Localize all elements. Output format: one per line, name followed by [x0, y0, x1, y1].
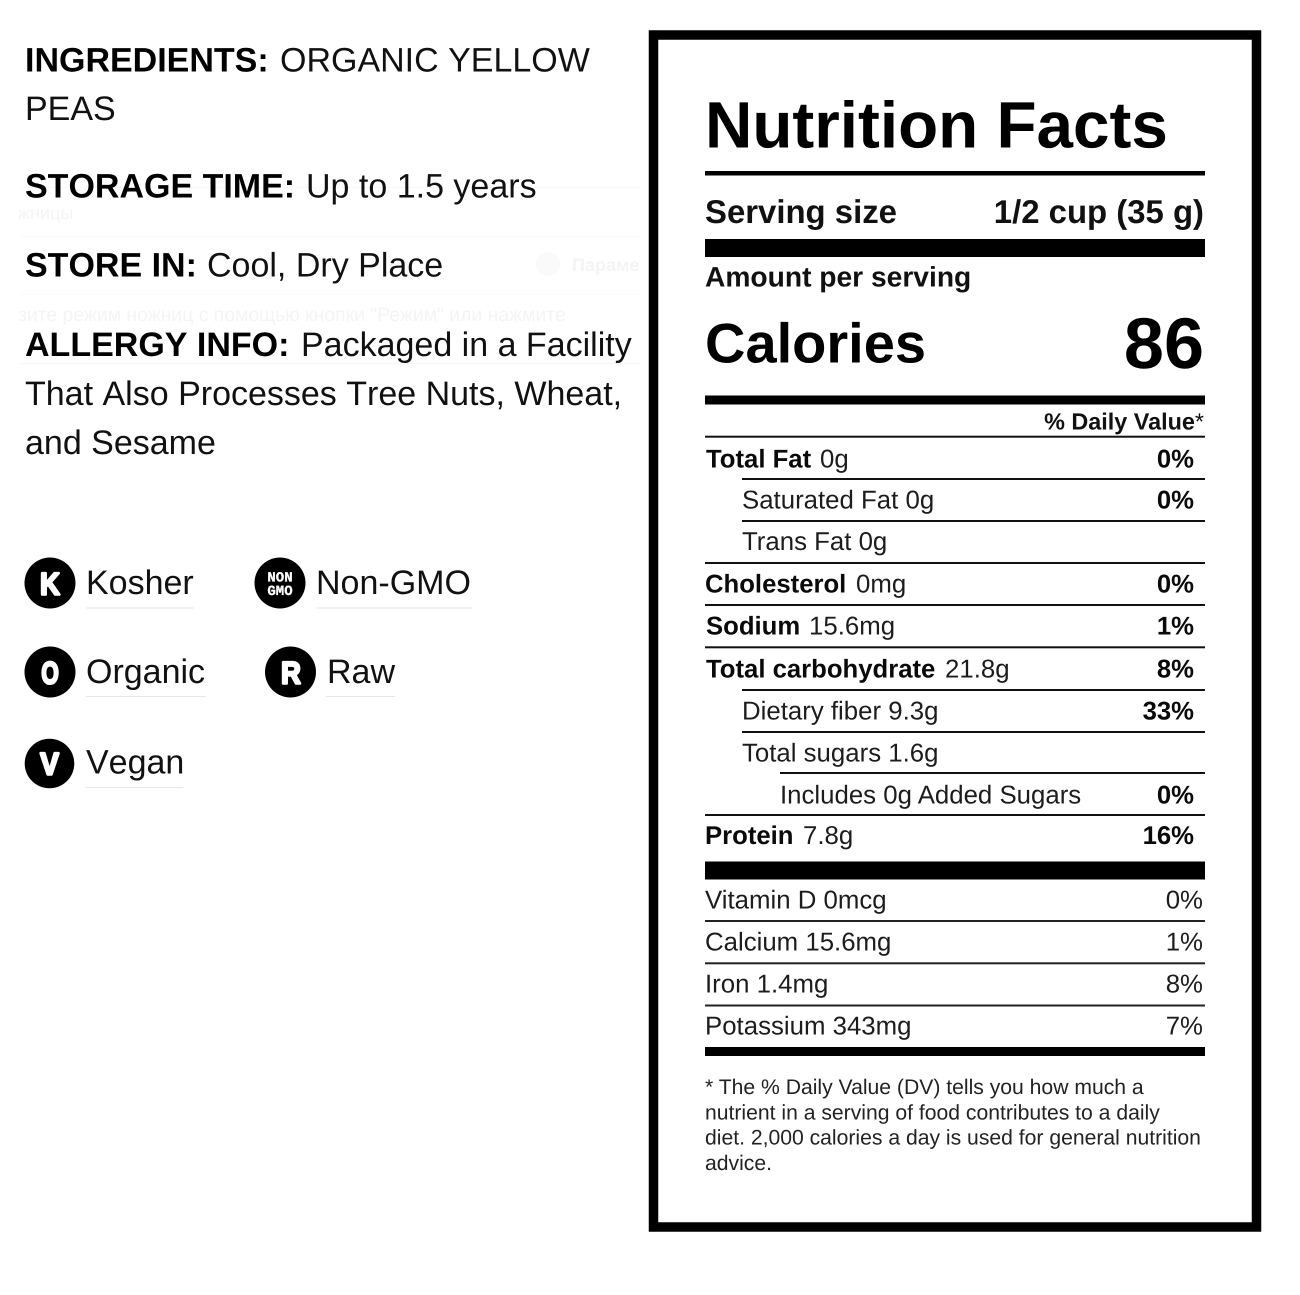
text block: store in: [25, 247, 443, 285]
badge: non-gmo: GMO: [267, 584, 293, 600]
daily value header: % Daily Value*: [1044, 408, 1204, 434]
calories block: Calories: [705, 312, 926, 375]
row: saturated fat: 0%: [1157, 486, 1194, 514]
text block: allergy info: [25, 326, 632, 462]
row: cholesterol: [705, 571, 1205, 606]
badge: non-gmo: NON: [267, 570, 293, 586]
footnote: diet. 2,000 calories a day is used for general nutrition: [705, 1126, 1201, 1150]
calories block: 86: [1124, 304, 1204, 384]
row: sodium: [705, 613, 1205, 648]
badge: organic: [24, 646, 206, 698]
badge: raw: Raw: [327, 653, 395, 691]
row: protein: 16%: [1143, 822, 1194, 850]
footnote: * The % Daily Value (DV) tells you how much a: [705, 1076, 1144, 1099]
row: cholesterol: 0mg: [856, 571, 906, 599]
badge: organic: O: [41, 655, 59, 690]
text block: store in: Cool, Dry Place: [207, 247, 443, 285]
row: dietary fiber: Dietary fiber 9.3g: [742, 697, 938, 725]
serving size row: 1/2 cup (35 g): [994, 193, 1204, 230]
badge: kosher: K: [40, 566, 60, 602]
row: added sugars: 0%: [1157, 781, 1194, 809]
row: cholesterol: Cholesterol: [705, 571, 846, 599]
row: iron: [705, 971, 1205, 1006]
panel: nutrition facts: [654, 35, 1256, 1227]
row: trans fat: Trans Fat 0g: [742, 528, 887, 556]
row: potassium: 7%: [1166, 1012, 1203, 1040]
row: total fat: [706, 445, 1205, 480]
row: protein: 7.8g: [803, 822, 853, 850]
row: total sugars: Total sugars 1.6g: [742, 739, 938, 767]
text block: allergy info: Packaged in a Facility: [301, 326, 632, 364]
row: iron: Iron 1.4mg: [705, 971, 828, 999]
row: sodium: 15.6mg: [809, 613, 895, 641]
serving size row: Serving size: [705, 193, 897, 230]
row: total carbohydrate: [706, 655, 1205, 691]
row: sodium: Sodium: [706, 613, 800, 641]
row: total carbohydrate: 8%: [1157, 655, 1194, 683]
row: total carbohydrate: Total carbohydrate: [706, 655, 935, 683]
row: added sugars: [705, 781, 1205, 816]
row: potassium: [705, 1012, 1205, 1056]
row: protein: Protein: [705, 822, 794, 850]
badge: non-gmo: Non-GMO: [316, 564, 471, 602]
row: total fat: 0g: [820, 445, 849, 473]
row: protein: [705, 822, 1205, 880]
row: total carbohydrate: 21.8g: [945, 655, 1010, 683]
row: saturated fat: [742, 486, 1205, 522]
heading: nutrition facts: Nutrition Facts: [705, 89, 1168, 162]
text block: storage time: Up to 1.5 years: [306, 168, 537, 206]
badge: vegan: [25, 739, 184, 788]
text block: allergy info: and Sesame: [25, 424, 216, 462]
text block: ingredients: ORGANIC YELLOW: [280, 42, 590, 80]
calories block: [705, 261, 1205, 404]
row: added sugars: Includes 0g Added Sugars: [780, 781, 1081, 809]
badge: vegan: V: [40, 746, 59, 782]
row: dietary fiber: [742, 697, 1205, 733]
badge: organic: Organic: [86, 653, 205, 691]
row: total fat: 0%: [1157, 445, 1194, 473]
row: saturated fat: Saturated Fat 0g: [742, 486, 934, 514]
text block: ingredients: PEAS: [25, 90, 116, 128]
footnote: advice.: [705, 1152, 772, 1175]
badge: kosher: Kosher: [86, 564, 194, 602]
badge: raw: R: [281, 656, 301, 690]
row: dietary fiber: 33%: [1143, 697, 1194, 725]
calories block: Amount per serving: [705, 261, 971, 293]
badge: kosher: [24, 558, 194, 608]
row: vitamin d: Vitamin D 0mcg: [705, 886, 887, 914]
footnote: nutrient in a serving of food contributes to a daily: [705, 1101, 1160, 1124]
row: total fat: Total Fat: [706, 445, 812, 473]
text: зите режим ножниц с помощью кнопки "Режим" или нажмите: [18, 304, 566, 326]
text block: allergy info: ALLERGY INFO:: [25, 326, 289, 364]
text block: storage time: STORAGE TIME:: [25, 168, 295, 206]
row: calcium: 1%: [1166, 929, 1203, 957]
row: vitamin d: 0%: [1166, 886, 1203, 914]
text: жницы: [18, 203, 73, 223]
row: cholesterol: 0%: [1157, 571, 1194, 599]
footnote: [705, 1076, 1201, 1175]
row: calcium: [705, 929, 1205, 964]
badge: vegan: Vegan: [86, 744, 184, 782]
row: vitamin d: [705, 886, 1205, 922]
serving size row: [705, 171, 1205, 257]
badge: raw: [265, 646, 395, 698]
text: Параме: [572, 255, 639, 275]
badge: non-gmo: [254, 558, 472, 608]
row: calcium: Calcium 15.6mg: [705, 929, 891, 957]
text block: allergy info: That Also Processes Tree Nuts, Wheat,: [25, 375, 622, 413]
text block: store in: STORE IN:: [25, 247, 197, 285]
text block: storage time: [25, 168, 537, 206]
row: sodium: 1%: [1157, 613, 1194, 641]
text block: ingredients: [25, 42, 590, 128]
text block: ingredients: INGREDIENTS:: [25, 42, 269, 80]
row: iron: 8%: [1166, 971, 1203, 999]
row: potassium: Potassium 343mg: [705, 1012, 911, 1040]
